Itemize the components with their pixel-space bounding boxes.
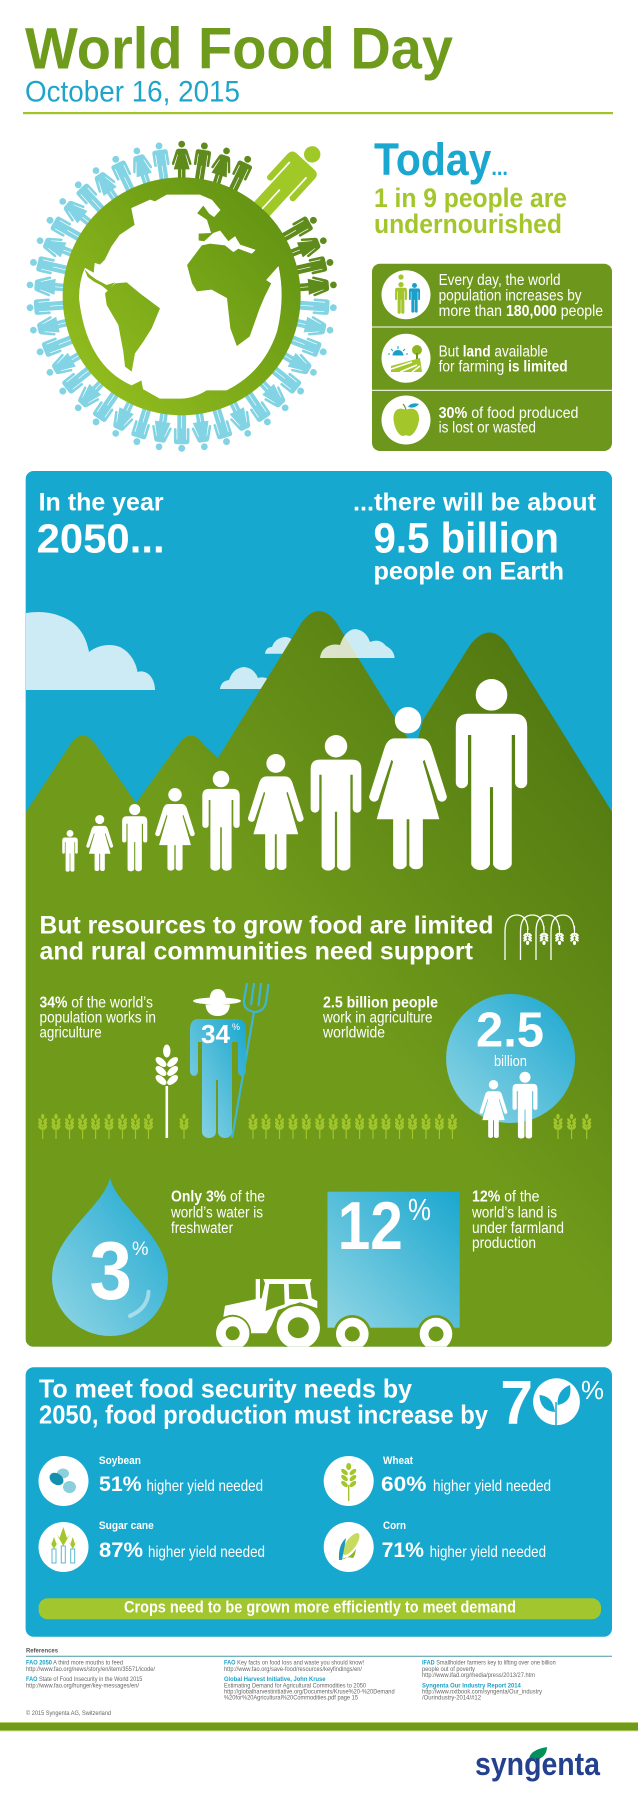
row of growing people [62, 679, 527, 872]
ring of blue and dark green people [26, 141, 338, 452]
panel: food security [26, 1367, 612, 1637]
references column 1: FAO State of Food Insecurity in the World 2015 [26, 1676, 143, 1683]
crop: soybean: Soybean [99, 1455, 141, 1467]
text: 9.5 billion people: ...there will be about [353, 489, 597, 517]
references column 1 [26, 1660, 155, 1689]
references column 2: FAO Key facts on food loss and waste you should know! [224, 1660, 364, 1667]
heading: resources limited: and rural communities need support [40, 937, 474, 965]
crop: soybean: higher yield needed [146, 1478, 263, 1495]
callout: 70 percent with sprout [500, 1369, 604, 1438]
references column 2: Global Harvest Initiative, John Kruse [224, 1676, 326, 1683]
text: 34 percent: 34% of the world’s [40, 995, 153, 1012]
text: 34 percent: population works in [40, 1010, 156, 1027]
text: population [439, 272, 603, 320]
chart: 2.5 billion circle: 2.5 [476, 1004, 544, 1058]
heading: Today: Today... [374, 134, 508, 185]
heading: food security: To meet food security needs by [39, 1373, 413, 1403]
heading: resources limited: But resources to grow food are limited [40, 911, 494, 939]
panel: 2050 outlook and resources [26, 471, 612, 1353]
crop: wheat [324, 1455, 551, 1506]
crop: corn: higher yield needed [430, 1544, 546, 1561]
references column 1: FAO 2050 A third more mouths to feed [26, 1660, 123, 1667]
crop: sugar cane: 87% [99, 1539, 143, 1562]
references column 3: Syngenta Our Industry Report 2014 [422, 1683, 521, 1690]
crop: corn: Corn [383, 1520, 406, 1532]
heading: resources limited [40, 911, 494, 965]
crop: soybean: 51% [99, 1473, 142, 1496]
cloud over mountain [320, 629, 395, 658]
crop: corn [324, 1520, 546, 1572]
label: 34 percent: 34 [201, 1019, 231, 1049]
text: 9.5 billion people: 9.5 billion [374, 515, 559, 563]
text: only 3 percent: world’s water is [170, 1205, 263, 1222]
date subtitle: October 16, 2015 [25, 76, 240, 109]
text: 12 percent: production [472, 1235, 536, 1252]
earth [63, 177, 301, 415]
text: population: Every day, the world [439, 272, 561, 289]
text: only 3 percent: freshwater [171, 1220, 233, 1237]
crop: soybean [38, 1455, 263, 1506]
chart: water drop 3 percent: 3 [90, 1224, 132, 1317]
references column 3: http://www.nxtbook.com/syngenta/Our_industry [422, 1689, 543, 1696]
icon: tractor with 12 percent trailer [214, 1188, 460, 1353]
icon: family [382, 270, 430, 319]
icon: farmer with pitchfork [190, 983, 268, 1138]
label: 34 percent: % [232, 1022, 240, 1032]
chart: 2.5 billion circle [446, 994, 575, 1139]
globe with ring of people [26, 136, 338, 452]
text: food waste [439, 405, 578, 437]
clouds behind mountains [26, 612, 296, 690]
text: population: population increases by [439, 288, 582, 305]
crop: corn: 71% [382, 1539, 424, 1562]
icon: tractor with 12 percent trailer: % [408, 1192, 431, 1227]
references column 3: http://www.ifad.org/media/press/2013/27.htm [422, 1672, 535, 1679]
text: in the year 2050 [38, 492, 164, 553]
references column 3: IFAD Smallholder farmers key to lifting over one billion [422, 1660, 556, 1667]
text: food waste: is lost or wasted [439, 420, 536, 437]
references column 3: /Ourindustry-2014/#12 [422, 1694, 481, 1702]
text: population: more than 180,000 people [439, 303, 603, 320]
callout: 70 percent with sprout: 7 [500, 1369, 533, 1438]
crop: wheat: Wheat [383, 1455, 413, 1467]
chart: 2.5 billion circle: billion [494, 1054, 527, 1070]
crop: wheat: higher yield needed [433, 1478, 551, 1495]
footer band [0, 1722, 638, 1731]
references column 2: http://www.fao.org/save-food/resources/keyfindings/en/ [224, 1666, 362, 1673]
chart: water drop 3 percent: % [132, 1239, 149, 1260]
heading: food security [39, 1373, 488, 1429]
references column 2: http://globalharvestinitiative.org/Documents/Kruse%20-%20Demand [224, 1688, 395, 1695]
text: food waste: 30% of food produced [439, 405, 578, 422]
text: 2.5 billion people: work in agriculture [322, 1010, 432, 1027]
text: land: But land available [439, 344, 548, 361]
chart: water drop 3 percent [52, 1177, 168, 1336]
text: 12 percent: under farmland [472, 1220, 564, 1237]
logo: syngenta: syngenta [475, 1746, 600, 1782]
subheading: 1 in 9: 1 in 9 people are [374, 183, 567, 213]
crop: sugar cane: Sugar cane [99, 1520, 154, 1532]
icon: apple [382, 396, 430, 444]
crop: wheat: 60% [381, 1473, 427, 1496]
text: only 3 percent: Only 3% of the [171, 1189, 265, 1206]
references: References [26, 1648, 58, 1655]
title: World Food Day [25, 16, 453, 81]
row of small wheat [37, 1114, 592, 1139]
text: 34 percent: agriculture [40, 1025, 102, 1042]
references column 2 [224, 1660, 395, 1702]
text: 34 percent [40, 995, 156, 1042]
text: in the year 2050: In the year [39, 489, 164, 517]
references column 1: http://www.fao.org/hunger/key-messages/en/ [26, 1682, 139, 1689]
mountains and ground [26, 611, 612, 1347]
icon: arched wheat [505, 915, 580, 960]
crop: sugar cane: higher yield needed [148, 1544, 265, 1561]
references column 2: %20for%20Agricultural%20Commodities.pdf page 15 [224, 1694, 358, 1702]
icon: farmland [382, 334, 430, 383]
text: 2.5 billion people: 2.5 billion people [323, 995, 438, 1012]
callout: 70 percent with sprout: % [581, 1375, 604, 1405]
references column 3: people out of poverty [422, 1666, 476, 1673]
text: in the year 2050: 2050... [37, 516, 165, 562]
copyright: © 2015 Syngenta AG, Switzerland [26, 1709, 111, 1717]
icon: tractor with 12 percent trailer: 12 [338, 1188, 403, 1264]
references column 2: Estimating Demand for Agricultural Commodities to 2050 [224, 1682, 366, 1689]
text: 12 percent [471, 1189, 564, 1252]
text: 2.5 billion people: worldwide [322, 1025, 385, 1042]
text: only 3 percent [171, 1190, 264, 1233]
text: 9.5 billion people: people on Earth [374, 557, 564, 585]
text: land [439, 344, 568, 376]
callout bar: crops efficiency [39, 1598, 601, 1619]
callout bar: crops efficiency: Crops need to be grown more efficiently to meet demand [124, 1599, 516, 1617]
text: 9.5 billion people [353, 489, 597, 585]
subheading: 1 in 9: undernourished [374, 209, 562, 239]
subheading: 1 in 9 [374, 183, 567, 239]
references column 3 [422, 1660, 556, 1702]
text: 12 percent: world’s land is [471, 1205, 557, 1222]
references [26, 1648, 612, 1717]
text: land: for farming is limited [439, 359, 568, 376]
references column 1: http://www.fao.org/news/story/en/item/35571/icode/ [26, 1666, 155, 1673]
large undernourished person [237, 136, 331, 234]
heading: food security: 2050, food production must increase by [39, 1399, 488, 1429]
panel: today's facts [372, 264, 612, 451]
text: 2.5 billion people [323, 996, 438, 1038]
icon: large white wheat [156, 1044, 178, 1138]
label: 34 percent [202, 1024, 240, 1044]
crop: sugar cane [38, 1520, 265, 1572]
text: 12 percent: 12% of the [472, 1189, 540, 1206]
